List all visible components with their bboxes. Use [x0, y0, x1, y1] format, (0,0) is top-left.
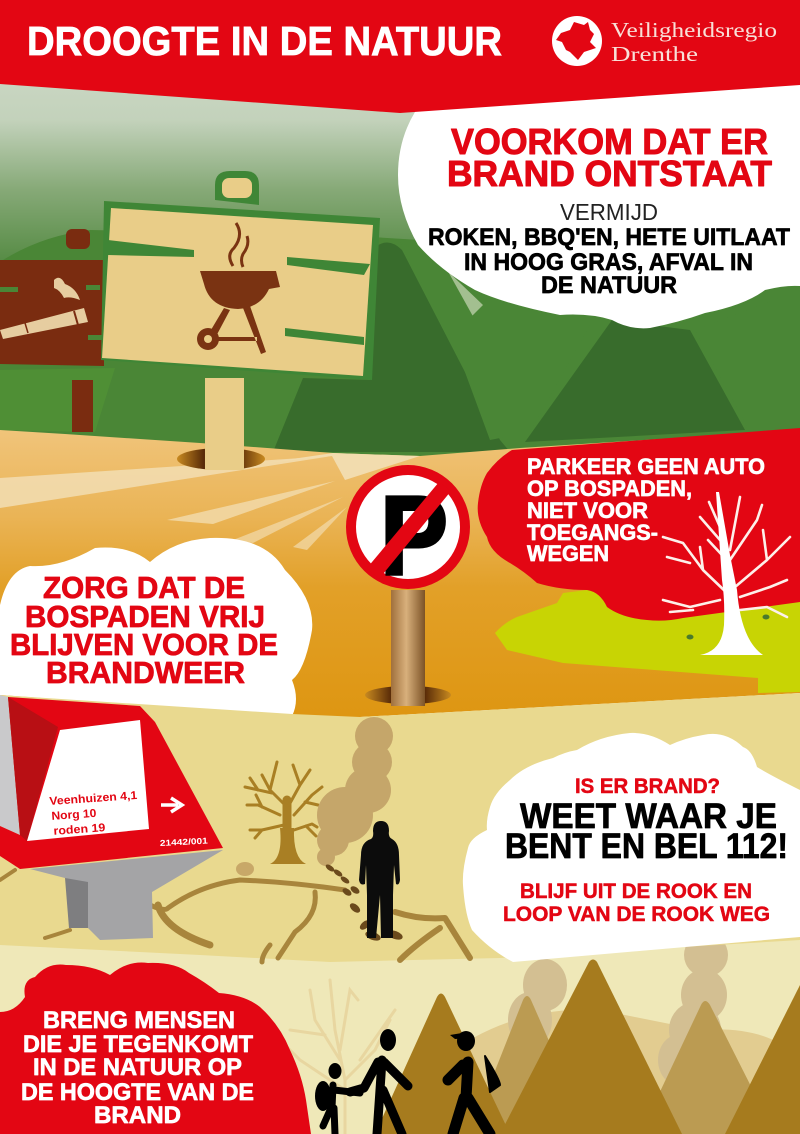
adult with cap and backpack — [448, 1031, 500, 1134]
grass tufts — [686, 634, 694, 640]
title: DROOGTE IN DE NATUUR — [27, 18, 502, 64]
dead brown tree — [245, 762, 322, 838]
marker body — [0, 697, 223, 869]
text: inform people: DE HOOGTE VAN DE — [21, 1079, 254, 1106]
hills — [0, 230, 800, 460]
marker left face — [0, 695, 20, 835]
text: do not park: TOEGANGS- — [527, 520, 658, 545]
icon: barbecue — [197, 223, 280, 354]
crack pool — [236, 862, 254, 876]
marker base — [30, 850, 223, 940]
text: inform people: BRENG MENSEN — [43, 1007, 235, 1034]
panel: header and prevention cloud — [0, 0, 800, 328]
marker arrow — [161, 798, 182, 812]
text: call 112: LOOP VAN DE ROOK WEG — [503, 903, 770, 926]
red cloud — [478, 428, 800, 621]
marker destinations: Norg 10 — [51, 808, 97, 823]
marker destinations: roden 19 — [53, 822, 106, 838]
text: keep forest paths free: BRANDWEER — [46, 655, 245, 690]
text: call 112 — [503, 775, 788, 926]
brown sign with cigarette — [0, 229, 104, 432]
sign board — [101, 201, 380, 380]
white cloud — [0, 538, 312, 716]
dry soil cracks — [0, 870, 470, 962]
icon: cigarette — [0, 278, 88, 339]
text: call 112: IS ER BRAND? — [575, 775, 720, 798]
no parking sign: P — [380, 473, 448, 598]
text: do not park — [527, 454, 765, 566]
white cloud — [398, 80, 800, 328]
text: keep forest paths free: ZORG DAT DE — [43, 570, 245, 605]
text: inform people: IN DE NATUUR OP — [33, 1054, 242, 1081]
text: keep forest paths free — [10, 570, 278, 690]
text: call 112: BLIJF UIT DE ROOK EN — [520, 880, 752, 903]
text: call 112: WEET WAAR JE — [520, 797, 777, 836]
panel: keep paths free, orange ground — [0, 171, 800, 717]
lime field — [495, 590, 800, 693]
pale ground — [0, 930, 800, 1134]
text: prevent fire — [428, 121, 790, 299]
sky — [0, 80, 800, 280]
logo: Veiligheidsregio Drenthe: Drenthe — [611, 42, 698, 66]
text: do not park: WEGEN — [527, 541, 609, 566]
logo: Veiligheidsregio Drenthe — [552, 16, 777, 66]
adult with child — [350, 1029, 408, 1134]
footprints — [324, 863, 404, 942]
child — [315, 1063, 360, 1134]
marker destinations: Veenhuizen 4,1 — [49, 790, 138, 808]
sign handle — [215, 171, 259, 205]
text: prevent fire: IN HOOG GRAS, AFVAL IN — [464, 249, 753, 276]
marker code: 21442/001 — [160, 835, 208, 848]
sun rays on path — [0, 453, 420, 550]
ground — [0, 430, 800, 717]
panel: is there a fire, cream ground — [0, 693, 800, 962]
brown mountains — [375, 960, 800, 1134]
panel: inform people, bottom landscape — [0, 930, 800, 1134]
pale dead tree — [280, 980, 395, 1134]
text: inform people: BRAND — [94, 1102, 181, 1129]
wooden sign with barbecue — [101, 171, 380, 470]
text: prevent fire: BRAND ONTSTAAT — [447, 153, 772, 194]
text: prevent fire: DE NATUUR — [541, 272, 677, 299]
dry white tree — [663, 492, 790, 655]
no parking sign — [346, 465, 470, 706]
red cloud — [0, 962, 311, 1134]
white cloud — [463, 733, 800, 962]
logo: Veiligheidsregio Drenthe: Veiligheidsregio — [611, 18, 777, 42]
smoke plume — [317, 717, 393, 866]
text: do not park: PARKEER GEEN AUTO — [527, 454, 765, 479]
text: keep forest paths free: BOSPADEN VRIJ — [25, 599, 265, 634]
cream ground — [0, 693, 800, 962]
text: do not park: OP BOSPADEN, — [527, 476, 692, 501]
tan hills — [440, 1010, 800, 1134]
family walking away — [315, 1029, 500, 1134]
sign hole — [177, 448, 265, 470]
text: keep forest paths free: BLIJVEN VOOR DE — [10, 627, 278, 662]
text: inform people — [21, 1007, 254, 1129]
text: inform people: DIE JE TEGENKOMT — [23, 1031, 253, 1058]
text: do not park: NIET VOOR — [527, 498, 648, 523]
walking man silhouette — [359, 821, 400, 938]
text: prevent fire: VOORKOM DAT ER — [451, 121, 768, 162]
marker panel — [27, 720, 149, 841]
smoke columns — [508, 933, 728, 1086]
red header band — [0, 0, 800, 113]
sign post — [205, 378, 244, 470]
panel: prevent fire, green landscape — [0, 80, 800, 460]
text: prevent fire: ROKEN, BBQ'EN, HETE UITLAAT — [428, 224, 790, 251]
road marker post — [0, 695, 223, 940]
marker destinations — [49, 790, 140, 838]
text: prevent fire: VERMIJD — [560, 199, 658, 225]
